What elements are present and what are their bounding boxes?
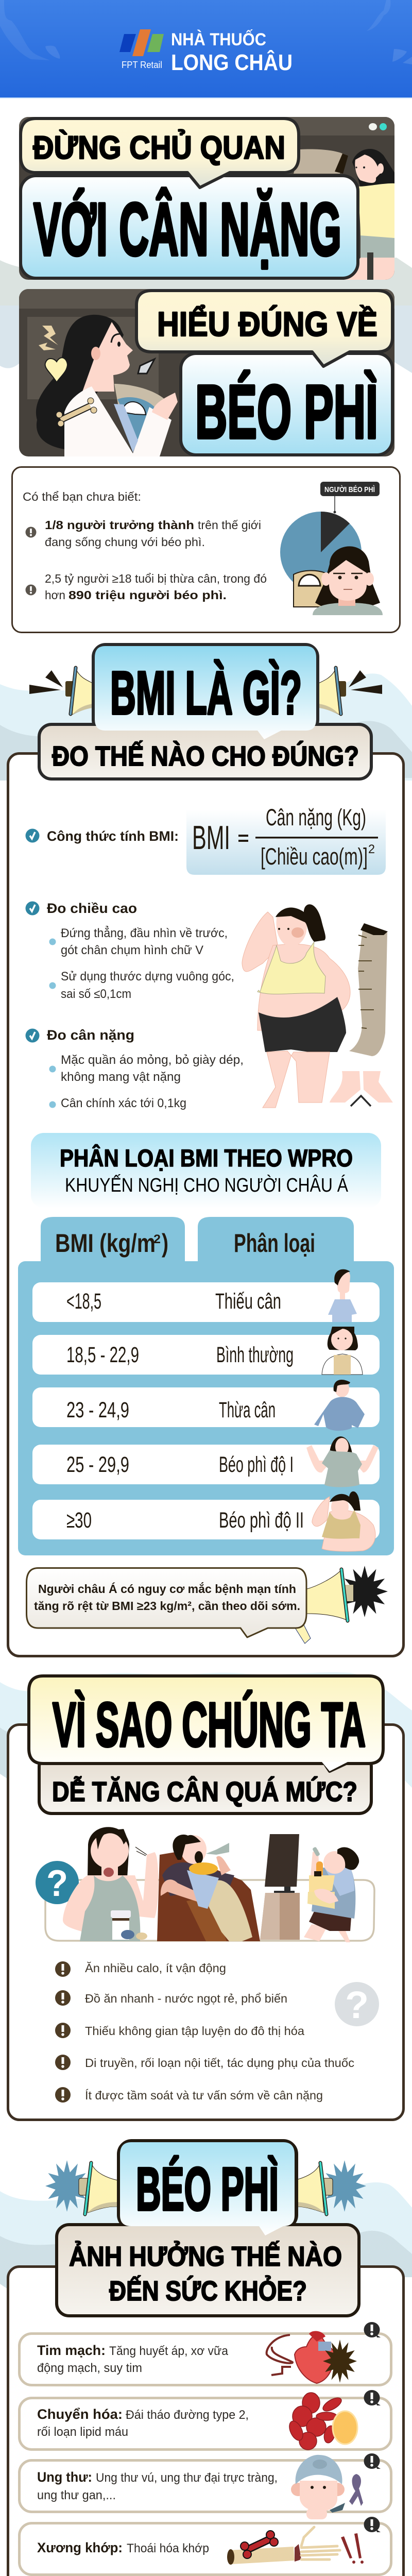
bubble: ảnh hưởng thế nào: ĐẾN SỨC KHỎE? <box>109 2276 307 2307</box>
measure weight block: không mang vật nặng <box>61 1070 181 1084</box>
row: bình thường <box>32 1327 380 1375</box>
icon: patient and ribbon <box>291 2455 363 2519</box>
table: bmi classification <box>18 1217 394 1555</box>
icon: arm bones <box>227 2527 364 2565</box>
callout: người châu á: Người châu Á có nguy cơ mắc bệnh mạn tính <box>38 1582 296 1596</box>
card: ung thư: Ung thư: <box>37 2469 92 2485</box>
card: tim mạch: động mạch, suy tim <box>37 2361 142 2375</box>
card: xương khớp <box>20 2517 391 2575</box>
row: bình thường: 18,5 - 22,9 <box>66 1343 139 1367</box>
bubble: đừng chủ quan: ĐỪNG CHỦ QUAN <box>33 129 285 166</box>
card: tim mạch: Tim mạch: <box>37 2343 106 2358</box>
row: thừa cân: 23 - 24,9 <box>66 1398 129 1422</box>
measure weight block: Mặc quần áo mỏng, bỏ giày dép, <box>61 1053 244 1067</box>
row: thừa cân: Thừa cân <box>219 1398 276 1422</box>
row: bình thường: Bình thường <box>216 1343 294 1367</box>
figure: woman with thyroid and pills <box>63 1827 159 1941</box>
cause 5: Ít được tầm soát và tư vấn sớm về cân nặng <box>85 2089 323 2102</box>
card: ung thư: Ung thư vú, ung thư đại trực tràng, <box>96 2471 278 2485</box>
icon: grey question mark <box>335 1982 379 2026</box>
formula box: [Chiều cao(m)] <box>261 843 368 870</box>
tag: người béo phì <box>320 482 380 513</box>
panel: health effects, lower part <box>8 2267 404 2576</box>
title panel: hiểu đúng về béo phì <box>19 289 394 456</box>
bubble: đừng chủ quan <box>21 118 299 188</box>
icon: bone <box>56 398 97 427</box>
measure height block: gót chân chụm hình chữ V <box>61 943 203 957</box>
table header: bmi: ) <box>162 1229 168 1258</box>
background waves: bmi section <box>0 673 412 781</box>
megaphone left <box>45 2160 118 2214</box>
callout: người châu á: tăng rõ rệt từ BMI ≥23 kg/m², cần theo dõi sớm. <box>34 1599 300 1613</box>
head <box>277 909 307 947</box>
woman portrait <box>313 546 383 615</box>
row: thiếu cân: <18,5 <box>66 1289 101 1314</box>
bubble: hiểu đúng về <box>136 291 392 366</box>
heading: bmi là gì <box>29 645 382 779</box>
fact 1: đang sống chung với béo phì. <box>45 535 205 549</box>
measure height block: sai số ≤0,1cm <box>61 987 131 1001</box>
figure: thin man <box>328 1269 357 1322</box>
row: béo phì độ II: Béo phì độ II <box>219 1508 304 1533</box>
banner: phân loại bmi theo wpro <box>31 1133 381 1208</box>
megaphone left <box>29 668 93 715</box>
figure: obese woman with raised arms <box>306 1436 379 1487</box>
fact 2: 2,5 tỷ người ≥18 tuổi bị thừa cân, trong đó <box>45 572 267 585</box>
fact 1 <box>26 518 261 549</box>
icon: blood cells and glucose meter <box>287 2393 357 2450</box>
heading: béo phì: BÉO PHÌ <box>136 2156 279 2224</box>
card: xương khớp: Xương khớp: <box>37 2540 123 2555</box>
logo text: NHÀ THUỐC: NHÀ THUỐC <box>171 29 266 49</box>
heading: béo phì <box>45 2141 366 2316</box>
figure: man on armchair <box>157 1835 260 1941</box>
badge <box>364 2517 381 2532</box>
table header: bmi: 2 <box>153 1232 161 1246</box>
card: ung thư: ung thư gan,... <box>37 2488 116 2502</box>
badge <box>364 2453 381 2469</box>
cause 3: Thiếu không gian tập luyện do đô thị hóa <box>85 2024 304 2038</box>
bubble: đo thế nào cho đúng: ĐO THẾ NÀO CHO ĐÚNG? <box>52 741 359 772</box>
icon: grey question mark: ? <box>345 1984 369 2026</box>
megaphone right <box>294 2160 366 2214</box>
logo text: FPT Retail: FPT Retail <box>122 60 162 70</box>
header band <box>0 0 412 98</box>
cause 2: Đồ ăn nhanh - nước ngọt rẻ, phổ biến <box>85 1992 287 2005</box>
card: chuyển hóa: Đái tháo đường type 2, <box>126 2408 249 2422</box>
callout: người châu á <box>27 1566 388 1643</box>
figure: overweight man <box>314 1380 365 1431</box>
badge <box>364 2390 381 2405</box>
heading: dễ tăng cân quá mức <box>39 1754 371 1814</box>
table header: bmi: BMI (kg/m <box>55 1229 156 1258</box>
megaphone right <box>319 668 382 715</box>
icon: question mark: ? <box>46 1863 68 1904</box>
row: béo phì độ I: Béo phì độ I <box>219 1452 294 1477</box>
megaphone <box>294 1566 388 1643</box>
cause 1 <box>55 1961 226 1977</box>
icon: question mark <box>36 1861 79 1904</box>
row: béo phì độ I: 25 - 29,9 <box>66 1452 129 1477</box>
row: thiếu cân <box>32 1269 380 1322</box>
fact 1: 1/8 người trưởng thành <box>45 518 194 532</box>
body <box>242 912 278 972</box>
formula box <box>186 804 386 875</box>
banner: phân loại bmi theo wpro: KHUYẾN NGHỊ CHO NGƯỜI CHÂU Á <box>65 1174 349 1196</box>
cause 1: Ăn nhiều calo, ít vận động <box>85 1961 226 1975</box>
text: intro: Có thể bạn chưa biết: <box>23 490 141 503</box>
table header: phân loại: Phân loại <box>234 1229 315 1258</box>
list: causes <box>55 1961 354 2103</box>
tape measure <box>349 925 387 1056</box>
fact 2: 890 triệu người béo phì. <box>68 588 227 602</box>
icon: arrow rock <box>138 359 154 374</box>
heading: vì sao chúng ta <box>29 1676 383 1771</box>
title panel: đừng chủ quan với cân nặng <box>19 117 394 280</box>
row: thừa cân <box>32 1380 380 1431</box>
bubble: ảnh hưởng thế nào <box>57 2225 359 2316</box>
measure weight block: Cân chính xác tới 0,1kg <box>61 1096 186 1110</box>
background wave behind title <box>0 258 412 373</box>
card: tim mạch <box>20 2322 391 2385</box>
panel: bmi main card <box>8 753 404 1656</box>
card: tim mạch: Tăng huyết áp, xơ vữa <box>109 2344 229 2358</box>
card: xương khớp: Thoái hóa khớp <box>127 2541 209 2555</box>
formula label: Công thức tính BMI: <box>47 828 179 844</box>
figure: television <box>260 1834 300 1940</box>
bubble: hiểu đúng về: HIỂU ĐÚNG VỀ <box>157 305 377 344</box>
figure: boy with snacks <box>304 1846 359 1942</box>
panel: health effects <box>8 2267 404 2576</box>
row: béo phì độ II <box>32 1492 380 1551</box>
cause 4: Di truyền, rối loạn nội tiết, tác dụng phụ của thuốc <box>85 2056 354 2070</box>
fact 2 <box>26 572 267 602</box>
woman doctor illustration <box>36 315 178 456</box>
bubble: với cân nặng <box>21 176 358 278</box>
measure height block: Đo chiều cao <box>47 901 137 916</box>
icon: heart <box>45 358 67 382</box>
card: ung thư <box>20 2453 391 2519</box>
tag: người béo phì: NGƯỜI BÉO PHÌ <box>324 485 375 494</box>
bubble: ảnh hưởng thế nào: ẢNH HƯỞNG THẾ NÀO <box>69 2241 342 2272</box>
card: chuyển hóa: rối loạn lipid máu <box>37 2425 128 2439</box>
formula block <box>26 804 386 875</box>
illustration: overweight woman with tape <box>242 904 388 1108</box>
background waves: why section <box>0 1672 412 1788</box>
card: chuyển hóa: Chuyển hóa: <box>37 2406 123 2422</box>
illustration frame: causes <box>36 1827 374 1942</box>
icon: scale <box>294 570 325 607</box>
panel: why weight gain <box>8 1725 404 2120</box>
figure: obese woman hand on head <box>312 1492 375 1551</box>
badge <box>364 2322 381 2337</box>
icon: lightning bolts <box>39 326 58 350</box>
card: chuyển hóa <box>20 2390 391 2450</box>
logo: FPT marks <box>119 29 164 56</box>
pie chart: 1/8 <box>280 512 362 593</box>
formula box: Cân nặng (Kg) <box>266 804 366 831</box>
formula box: 2 <box>368 842 375 856</box>
measure weight block: Đo cân nặng <box>47 1027 134 1043</box>
heading: dễ tăng cân quá mức: DỄ TĂNG CÂN QUÁ MỨC? <box>52 1776 357 1807</box>
bubble: đo thế nào cho đúng <box>39 724 371 779</box>
fact 2: hơn <box>45 588 65 602</box>
panel: có thể bạn chưa biết <box>12 467 400 633</box>
row: béo phì độ I <box>32 1436 380 1487</box>
figure: normal woman <box>322 1327 363 1375</box>
table header: phân loại <box>198 1217 354 1261</box>
measure height block: Sử dụng thước dựng vuông góc, <box>61 970 234 984</box>
icon: heart with burst <box>267 2331 357 2383</box>
fact 1: trên thế giới <box>198 518 261 532</box>
formula box: BMI <box>192 819 230 856</box>
icon: feet in V <box>330 1071 393 1106</box>
measure weight block <box>26 1027 244 1110</box>
check icon <box>26 828 39 843</box>
woman illustration <box>344 149 394 280</box>
logo text: LONG CHÂU: LONG CHÂU <box>171 49 293 75</box>
row: béo phì độ II: ≥30 <box>66 1508 92 1533</box>
banner: phân loại bmi theo wpro: PHÂN LOẠI BMI THEO WPRO <box>60 1144 353 1172</box>
table header: bmi <box>41 1217 185 1261</box>
background waves: obesity section <box>0 2182 412 2290</box>
measure height block <box>26 901 234 1001</box>
measure height block: Đứng thẳng, đầu nhìn về trước, <box>61 925 228 940</box>
row: thiếu cân: Thiếu cân <box>215 1289 281 1314</box>
